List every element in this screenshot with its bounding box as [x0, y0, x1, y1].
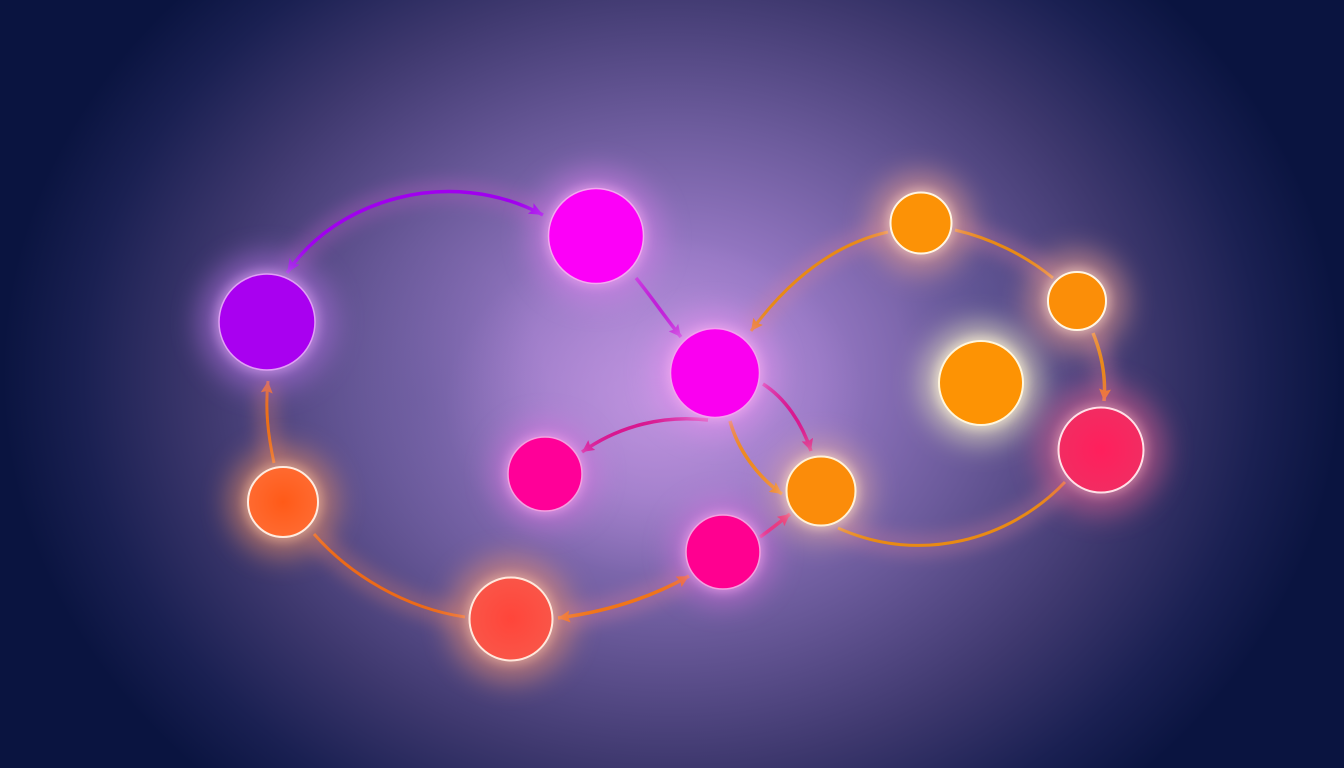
arrow: coral to lower pink, double headed	[558, 576, 689, 618]
node: magenta centre	[653, 311, 777, 435]
arrow: centre to orange node, orange	[730, 421, 782, 494]
arrow: centre to pink node	[582, 419, 708, 452]
arrow glows	[267, 192, 1105, 618]
node: purple	[199, 254, 335, 390]
arrow: orange-red to coral	[314, 534, 465, 617]
node: orange right small	[1027, 251, 1127, 351]
arrow: centre to orange node, pink	[763, 384, 811, 451]
node: pink lower	[671, 500, 775, 604]
arrow: orange-red to purple	[267, 381, 274, 463]
arrow: purple to magenta, double headed	[287, 192, 543, 273]
node: orange top	[871, 173, 971, 273]
arrow: top orange to centre	[751, 232, 888, 331]
node: orange centre right	[771, 441, 871, 541]
node: coral bottom	[449, 557, 573, 681]
arrow: top orange to right orange	[955, 230, 1053, 278]
arrow: magenta top to magenta centre	[636, 278, 681, 337]
arrow: right orange to red	[1093, 333, 1105, 401]
node: red right	[1037, 386, 1165, 514]
node: magenta top	[530, 170, 662, 302]
node: pink left	[493, 422, 597, 526]
arrow: lower pink to orange node	[760, 514, 790, 537]
arrow: red to orange node	[838, 482, 1065, 545]
node: orange-red left	[229, 448, 337, 556]
node: amber isolated	[921, 323, 1041, 443]
